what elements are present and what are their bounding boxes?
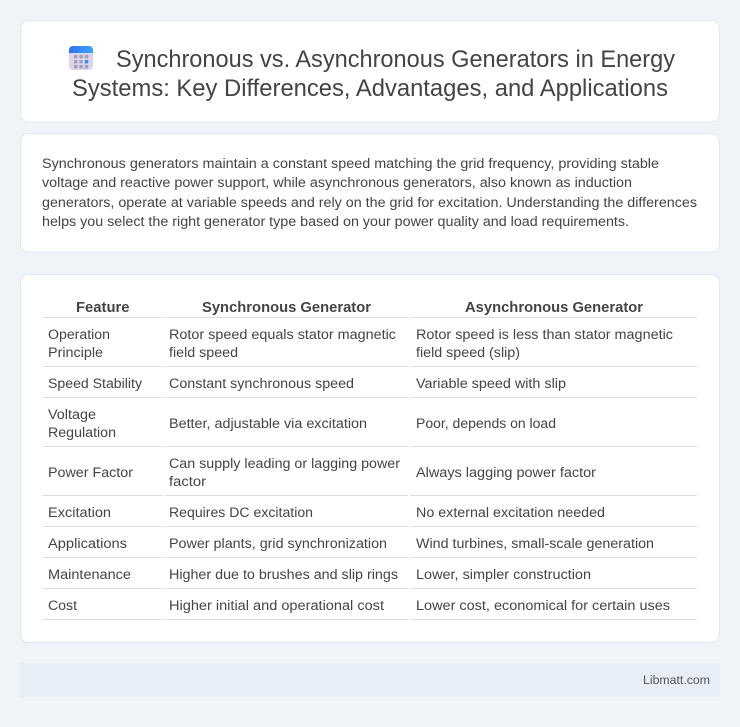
row: speed stability	[43, 376, 697, 398]
row: voltage regulation	[43, 407, 697, 447]
panel: comparison table	[20, 274, 720, 642]
row: maintenance	[43, 567, 697, 589]
row: operation principle: Principle	[48, 345, 103, 361]
row: operation principle	[43, 327, 697, 367]
row: speed stability: Speed Stability	[48, 376, 143, 392]
row: voltage regulation: Voltage	[48, 407, 96, 423]
row: voltage regulation: Regulation	[48, 425, 116, 441]
table header row: Asynchronous Generator	[465, 300, 643, 316]
intro paragraph	[42, 156, 697, 230]
row: voltage regulation: Better, adjustable via excitation	[169, 416, 367, 432]
heading: Synchronous vs. Asynchronous Generators in Energy	[116, 46, 675, 73]
heading	[72, 46, 675, 102]
row: power factor: Always lagging power factor	[416, 465, 596, 481]
row: power factor: factor	[169, 474, 206, 490]
row: applications: Applications	[48, 536, 127, 552]
intro paragraph: Synchronous generators maintain a constant speed matching the grid frequency, providing stable	[42, 156, 659, 172]
row: voltage regulation: Poor, depends on load	[416, 416, 556, 432]
row: operation principle: field speed (slip)	[416, 345, 520, 361]
intro paragraph: helps you select the right generator type based on your power quality and load requirements.	[42, 214, 629, 230]
row: applications: Wind turbines, small-scale generation	[416, 536, 654, 552]
row: power factor: Power Factor	[48, 465, 133, 481]
row: operation principle: Operation	[48, 327, 110, 343]
row: applications	[43, 536, 697, 558]
intro paragraph: voltage and reactive power support, while asynchronous generators, also known as induction	[42, 175, 632, 191]
row: cost: Higher initial and operational cost	[169, 598, 384, 614]
table header row: Feature	[76, 300, 130, 316]
row: excitation: Requires DC excitation	[169, 505, 313, 521]
row: operation principle: Rotor speed is less than stator magnetic	[416, 327, 673, 343]
row: excitation: Excitation	[48, 505, 111, 521]
row: excitation	[43, 505, 697, 527]
row: excitation: No external excitation needed	[416, 505, 605, 521]
row: cost	[43, 598, 697, 620]
row: maintenance: Maintenance	[48, 567, 131, 583]
row: cost: Lower cost, economical for certain uses	[416, 598, 670, 614]
row: power factor	[43, 456, 697, 496]
row: operation principle: field speed	[169, 345, 238, 361]
table header row	[43, 300, 697, 318]
footer bar	[20, 663, 720, 697]
row: maintenance: Lower, simpler construction	[416, 567, 591, 583]
row: applications: Power plants, grid synchronization	[169, 536, 387, 552]
row: speed stability: Constant synchronous speed	[169, 376, 354, 392]
panel: title	[20, 20, 720, 122]
table header row: Synchronous Generator	[202, 300, 371, 316]
row: power factor: Can supply leading or lagging power	[169, 456, 400, 472]
row: operation principle: Rotor speed equals stator magnetic	[169, 327, 396, 343]
icon: calendar	[69, 46, 93, 70]
intro paragraph: generators, operate at variable speeds and rely on the grid for excitation. Understanding the differences	[42, 195, 697, 211]
row: speed stability: Variable speed with slip	[416, 376, 566, 392]
row: maintenance: Higher due to brushes and slip rings	[169, 567, 398, 583]
footer bar: Libmatt.com	[643, 673, 710, 687]
heading: Systems: Key Differences, Advantages, and Applications	[72, 75, 668, 102]
row: cost: Cost	[48, 598, 77, 614]
panel: introduction	[20, 134, 720, 252]
